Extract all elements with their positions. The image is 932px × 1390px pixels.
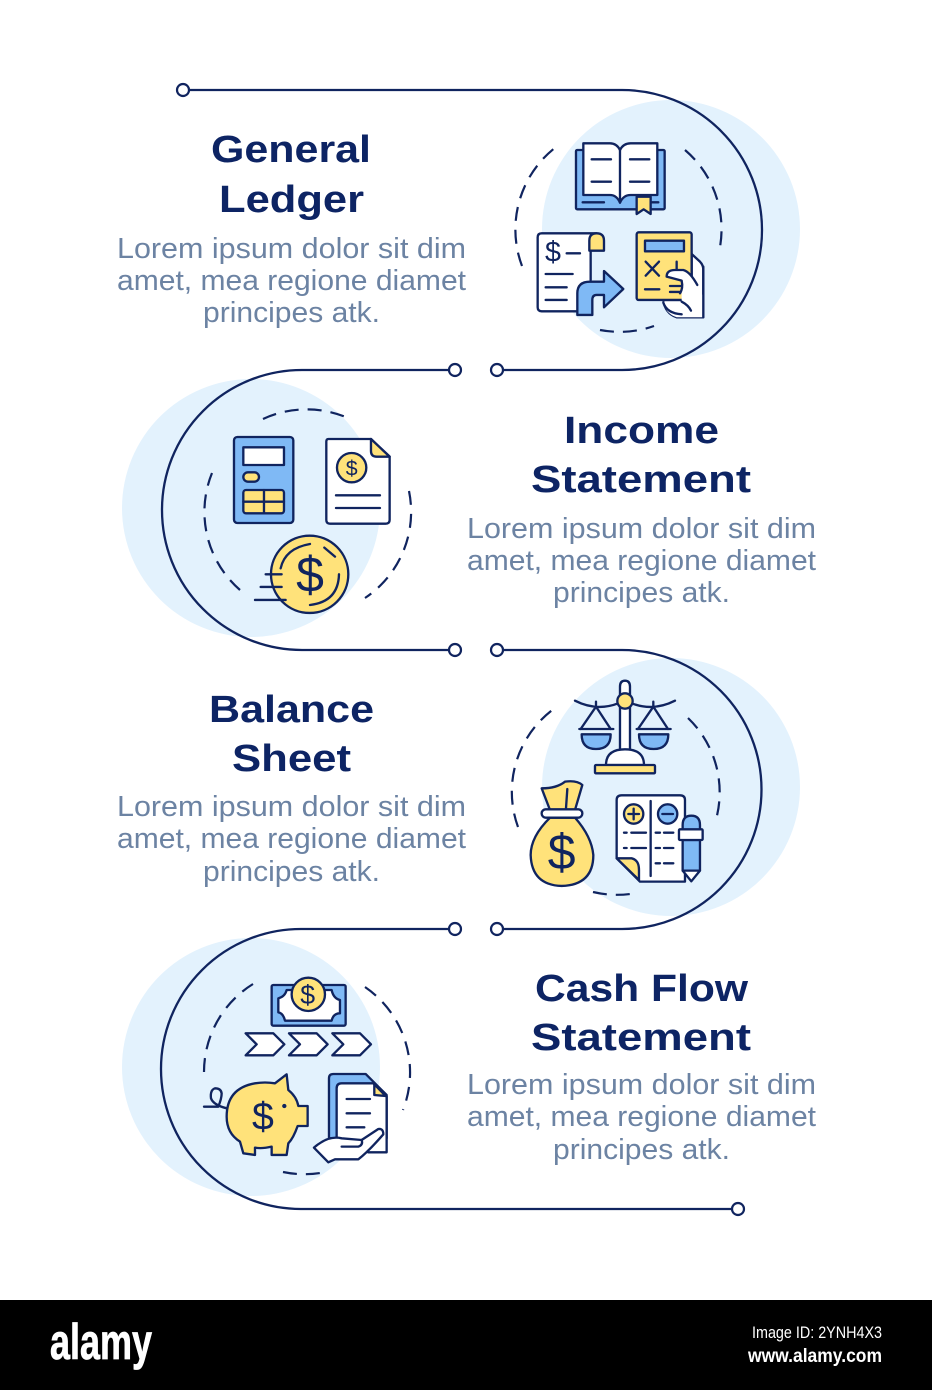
footer bar — [0, 1300, 932, 1390]
description: Lorem ipsum dolor sit dim — [117, 791, 466, 823]
heading: Statement — [531, 1017, 751, 1059]
icon: calculator, document, coin: $ — [296, 547, 324, 603]
dashed ring — [512, 708, 720, 895]
icon: calculator, document, coin: $ — [346, 457, 358, 481]
panel: balance sheet — [117, 644, 800, 935]
description: Lorem ipsum dolor sit dim — [467, 513, 816, 545]
website: www.alamy.com — [747, 1346, 882, 1367]
right top dot — [491, 644, 503, 656]
panel: general ledger — [117, 84, 800, 376]
icon: book, invoice, calculator: $ — [545, 237, 561, 269]
panel: cash flow statement — [122, 923, 816, 1215]
dashed ring — [515, 147, 722, 332]
description: amet, mea regione diamet — [117, 823, 466, 855]
icon: banknote, chevrons, piggy bank, document in hand: $ — [252, 1094, 274, 1138]
icon: calculator, document, coin — [234, 437, 390, 613]
heading: General — [211, 129, 371, 171]
background circle — [542, 100, 800, 358]
description — [467, 513, 816, 609]
left top dot — [449, 364, 461, 376]
background circle — [122, 938, 380, 1196]
description: principes atk. — [553, 1134, 730, 1166]
left dot — [449, 923, 461, 935]
dashed ring — [204, 409, 411, 598]
icon: banknote, chevrons, piggy bank, document in hand: $ — [300, 980, 315, 1010]
heading — [531, 968, 751, 1059]
description: principes atk. — [553, 577, 730, 609]
description: principes atk. — [203, 856, 380, 888]
heading: Income — [564, 410, 719, 452]
image id: Image ID: 2YNH4X3 — [752, 1323, 882, 1342]
connector line — [183, 90, 762, 370]
description — [117, 233, 466, 329]
description — [467, 1069, 816, 1166]
panel: income statement — [122, 364, 816, 656]
dashed ring — [204, 984, 410, 1174]
heading: Cash Flow — [535, 968, 748, 1010]
icon: banknote, chevrons, piggy bank, document in hand — [204, 978, 387, 1162]
heading — [531, 410, 751, 501]
stock logo: alamy — [50, 1314, 152, 1370]
icon: scales, money bag, ledger with pen — [531, 681, 703, 886]
left bottom dot — [449, 644, 461, 656]
description: principes atk. — [203, 297, 380, 329]
background circle — [542, 658, 800, 916]
heading — [209, 689, 374, 780]
heading: Sheet — [232, 738, 351, 780]
icon: scales, money bag, ledger with pen: $ — [548, 824, 576, 880]
description: amet, mea regione diamet — [467, 1101, 816, 1133]
finish dot — [732, 1203, 744, 1215]
description: amet, mea regione diamet — [117, 265, 466, 297]
description: Lorem ipsum dolor sit dim — [117, 233, 466, 265]
heading — [211, 129, 371, 221]
description — [117, 791, 466, 888]
start dot — [177, 84, 189, 96]
description: Lorem ipsum dolor sit dim — [467, 1069, 816, 1101]
icon: book, invoice, calculator — [538, 143, 703, 317]
connector line — [497, 650, 762, 929]
heading: Ledger — [219, 179, 364, 221]
connector line — [162, 370, 455, 650]
end dot — [491, 364, 503, 376]
description: amet, mea regione diamet — [467, 545, 816, 577]
connector line — [161, 929, 738, 1209]
heading: Balance — [209, 689, 374, 731]
background circle — [122, 379, 380, 637]
right bottom dot — [491, 923, 503, 935]
heading: Statement — [531, 459, 751, 501]
